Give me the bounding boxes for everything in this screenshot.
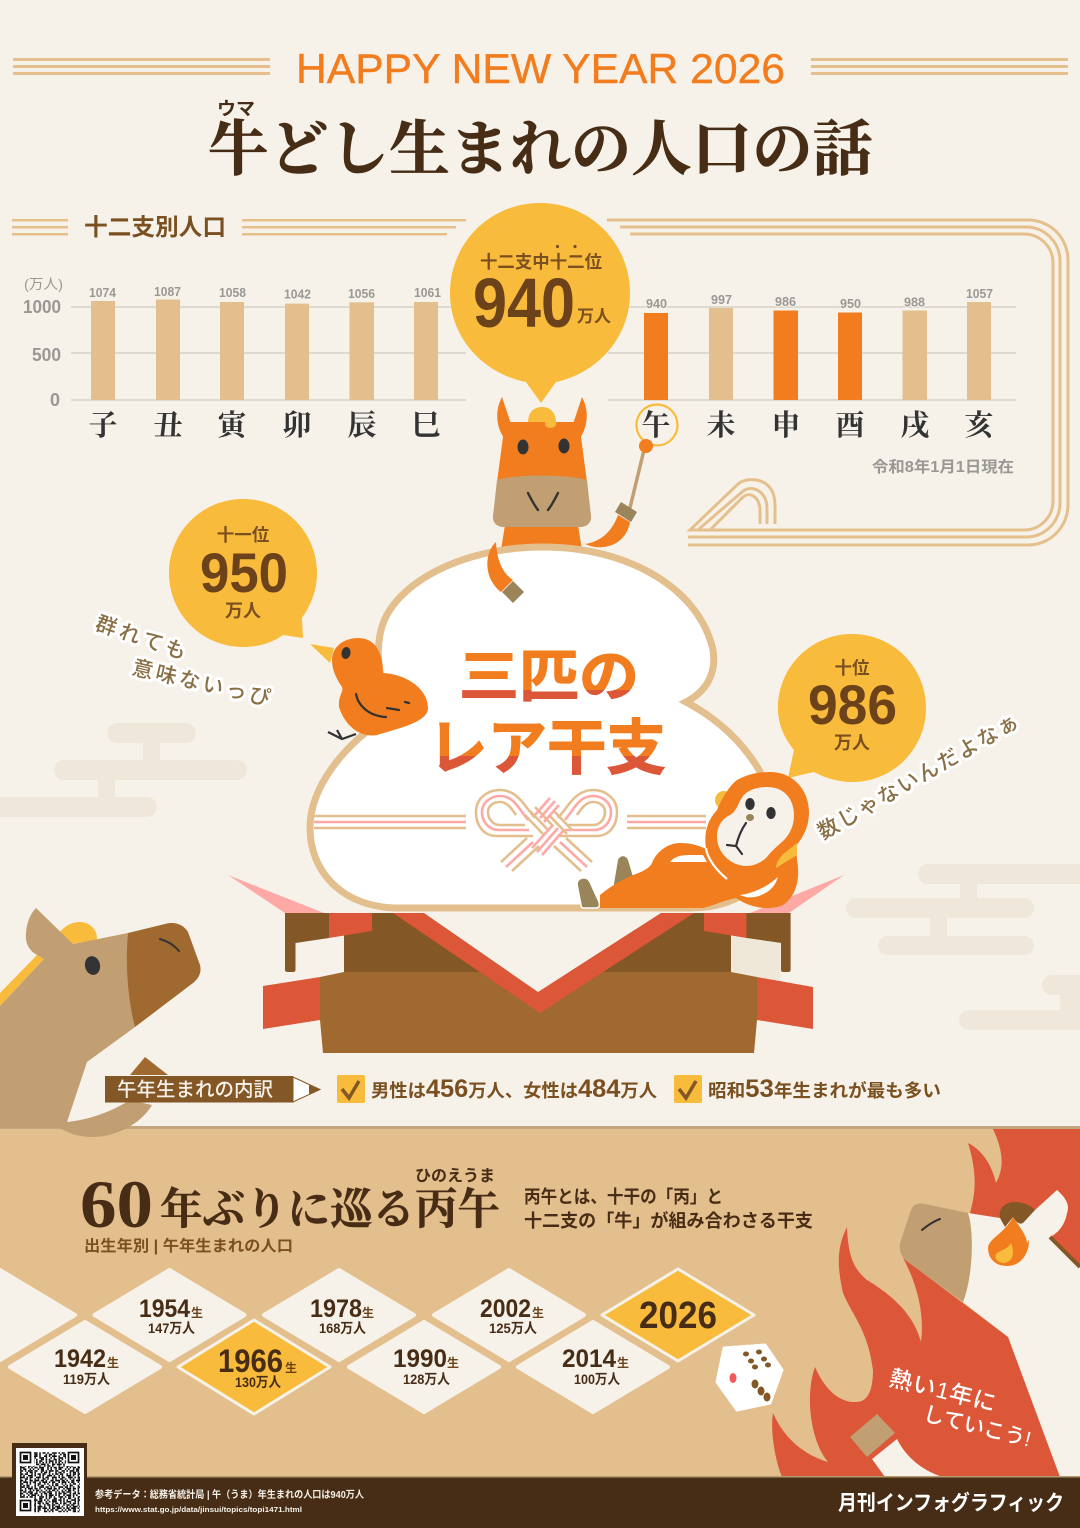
bubble: tenth place 986: 986 (808, 673, 897, 736)
section heading: hinoeuma (80, 1166, 500, 1242)
upper tray (344, 913, 731, 973)
burning horse right (772, 1129, 1080, 1477)
value labels: 997 (711, 293, 732, 307)
eyes (745, 798, 776, 819)
horse on top of mochi holding pointer (493, 397, 653, 550)
feet (577, 878, 599, 908)
headline: three rare zodiac: レア干支 (428, 715, 666, 782)
diamond: 1978: 168万人 (319, 1320, 366, 1336)
diamond: 2002: 125万人 (489, 1320, 537, 1336)
diamond: partial (0, 1270, 75, 1360)
brush band (615, 502, 637, 522)
tail tuft cream (872, 1439, 943, 1477)
eye (83, 955, 102, 976)
muzzle (493, 476, 591, 527)
bubble: eleventh place 950 (169, 499, 317, 647)
kagami mochi (310, 547, 777, 908)
eye (341, 646, 351, 660)
value labels: 988 (904, 296, 925, 310)
diamond: 1990: 1990 (393, 1345, 447, 1373)
flame inner (995, 1243, 1013, 1263)
bubble: eleventh place 950: 950 (200, 541, 288, 604)
value labels: 1042 (284, 288, 311, 302)
nose (746, 814, 754, 821)
tail brush (585, 515, 630, 547)
pink paper corners (228, 875, 844, 913)
bubble: tenth place 986: 十位 (834, 658, 870, 678)
diamond: 1954: 1954 (139, 1295, 190, 1323)
diamond: 1990: 生 (447, 1355, 459, 1370)
bow loop right (558, 790, 617, 836)
muzzle (900, 1203, 972, 1302)
zodiac characters: 亥 (964, 409, 994, 442)
header stripes right (811, 58, 1068, 75)
diamond: 2014: 100万人 (574, 1371, 620, 1387)
forelock (528, 407, 556, 428)
timeline diamonds (0, 1269, 754, 1414)
band edge (0, 1126, 1080, 1129)
mane (1050, 1237, 1080, 1267)
diamond: 2014: 2014 (562, 1345, 616, 1373)
face (497, 422, 587, 482)
heading: happy new year: HAPPY NEW YEAR 2026 (296, 45, 785, 92)
diamond: 1954: 147万人 (148, 1320, 195, 1336)
clouds: left (0, 723, 247, 817)
pointer stick (628, 450, 644, 516)
quote: bird: 群れても (92, 612, 193, 666)
diamond: 1966: 生 (285, 1360, 297, 1375)
zodiac characters: 寅 (217, 409, 249, 442)
decorative cord frame (607, 220, 1068, 545)
y axis labels (23, 276, 63, 410)
check item: showa 53: 昭和53年生まれが最も多い (708, 1075, 941, 1103)
diamond: 2014: 生 (617, 1355, 629, 1370)
cream paper (424, 913, 661, 992)
y axis labels: 1000 (23, 297, 61, 317)
zodiac characters: 未 (706, 409, 736, 442)
diamond: 1990 (349, 1322, 499, 1412)
diamond: 1966 (178, 1320, 330, 1414)
bubble: twelfth place 940 (450, 203, 630, 403)
footer top edge (0, 1476, 1080, 1478)
description: 十二支の「牛」が組み合わさる干支 (524, 1210, 813, 1231)
diamond: 1942: 生 (107, 1355, 119, 1370)
lower flame with text area (772, 1227, 1060, 1477)
diamond: 2002 (434, 1270, 584, 1360)
muzzle (127, 923, 201, 1027)
horse body (963, 1190, 1080, 1477)
bubble: tenth place 986: 万人 (834, 733, 870, 753)
lower band (0, 1128, 1080, 1478)
check item: male female: 男性は456万人、女性は484万人 (371, 1075, 657, 1103)
breakdown pencil banner: 午年生まれの内訳 (117, 1079, 273, 1101)
diamond: 1966: 1966 (218, 1343, 283, 1379)
mane (0, 955, 44, 1006)
ear left (715, 791, 733, 809)
mizuhiki cord bow (314, 790, 706, 871)
value labels: 1061 (414, 286, 441, 300)
zodiac characters (88, 409, 994, 442)
body (0, 908, 152, 1137)
quote: bird (92, 612, 275, 711)
bubble: eleventh place 950: 万人 (225, 601, 261, 621)
diamond: 1990: 128万人 (403, 1371, 450, 1387)
dice (717, 1345, 782, 1410)
ears (497, 397, 587, 438)
red V ribbon (393, 913, 694, 1013)
description: 丙午とは、十干の「丙」と (524, 1187, 723, 1207)
diamond: 1978 (264, 1270, 414, 1360)
bow loop left (476, 790, 535, 836)
horse tail over mochi (487, 542, 524, 603)
sanbo offering stand (228, 875, 844, 1053)
value labels: 1057 (966, 287, 993, 301)
bubble: eleventh place 950: 十一位 (217, 525, 270, 545)
pointer ball (639, 439, 653, 453)
cream side panel (731, 936, 780, 981)
flame icon (988, 1217, 1029, 1266)
source url: https://www.stat.go.jp/data/jinsui/topics/topi1471.html (95, 1505, 302, 1514)
value labels (89, 285, 993, 311)
section heading: hinoeuma: 60 (80, 1166, 153, 1242)
diamond: 2026 (602, 1269, 754, 1361)
legs (328, 730, 356, 739)
tail wrap tan (850, 1414, 895, 1457)
tail gap (740, 877, 778, 897)
zodiac characters: 戌 (900, 409, 930, 442)
diamond: 2002: 2002 (480, 1295, 531, 1323)
value labels: 1056 (348, 287, 375, 301)
small brown ear (130, 1057, 168, 1075)
zodiac characters: 巳 (411, 410, 441, 442)
lower tray (320, 972, 757, 1053)
bird (310, 638, 428, 739)
value labels: 1058 (219, 286, 246, 300)
bubble: twelfth place 940: 十二支中十二位 (480, 252, 602, 272)
diamond: 1954 (94, 1270, 244, 1360)
quote: bird: 意味ないっぴ (130, 656, 275, 711)
bow knot and tails (501, 798, 592, 871)
zodiac characters: 卯 (282, 409, 312, 442)
zodiac characters: 子 (88, 410, 118, 442)
breakdown pencil banner (105, 1076, 320, 1102)
red ribbons lower (263, 977, 813, 1029)
footer bar (0, 1477, 1080, 1528)
clouds: right (846, 864, 1080, 1030)
zodiac characters: 辰 (347, 409, 377, 442)
forelock (60, 922, 97, 947)
value labels: 986 (775, 295, 796, 309)
bubble: twelfth place 940: 万人 (577, 307, 611, 326)
ear right (776, 843, 797, 868)
value labels: 940 (646, 297, 667, 311)
diamond: 1978: 1978 (310, 1295, 362, 1323)
red ribbons upper (329, 913, 746, 938)
headline: three rare zodiac: 三匹の (459, 645, 639, 708)
zodiac characters: 酉 (835, 409, 865, 442)
diamond: 1942 (10, 1322, 160, 1412)
bars (91, 300, 991, 400)
neck (501, 525, 582, 550)
quote: monkey: 数じゃないんだよなぁ (814, 709, 1025, 844)
bubble: twelfth place 940: 940 (473, 264, 575, 342)
diamond: 1942: 119万人 (63, 1371, 110, 1387)
callout: hot year: 熱い1年に (887, 1365, 1000, 1416)
zodiac characters: 申 (771, 409, 801, 442)
qr code (12, 1443, 87, 1521)
diamond: 1954: 生 (191, 1305, 203, 1320)
body and hood (600, 772, 809, 908)
forelock (1000, 1202, 1035, 1227)
heading ruby: ウマ (217, 99, 255, 119)
white highlights (706, 848, 727, 879)
monkey (577, 772, 809, 908)
beak (310, 644, 334, 663)
value labels: 1074 (89, 286, 116, 300)
y axis labels: 500 (32, 345, 61, 365)
value labels: 950 (840, 297, 861, 311)
callout: hot year: していこう! (921, 1403, 1033, 1452)
circle around horse character (636, 404, 678, 446)
bubble: tenth place 986 (778, 634, 926, 782)
wing (356, 694, 409, 717)
eye line (160, 939, 179, 951)
diamond: 1978: 生 (362, 1305, 374, 1320)
value labels: 1087 (154, 285, 181, 299)
section heading: hinoeuma: 年ぶりに巡る丙午 (160, 1186, 500, 1234)
section heading: population by zodiac: 十二支別人口 (84, 214, 226, 240)
section sub heading: 出生年別 | 午年生まれの人口 (84, 1236, 293, 1255)
eye line (922, 1219, 940, 1230)
diamond: 2014 (518, 1322, 668, 1412)
diamond: 1942: 1942 (54, 1345, 106, 1373)
mouth (727, 823, 746, 854)
diamond: 1966: 130万人 (235, 1374, 281, 1390)
eyes and nostrils (518, 438, 570, 510)
face (717, 787, 794, 866)
y axis labels: 0 (50, 390, 60, 410)
callout: hot year (887, 1365, 1033, 1452)
headline: three rare zodiac (428, 645, 666, 782)
main title: 牛どし生まれの人口の話 (208, 117, 873, 183)
bar chart: population by zodiac (23, 276, 1016, 476)
diamond: 2026: 2026 (639, 1295, 717, 1337)
body (332, 638, 428, 735)
section heading: hinoeuma: ひのえうま (415, 1167, 495, 1185)
source text: 参考データ：総務省統計局 | 午（うま）年生まれの人口は940万人 (95, 1488, 364, 1501)
diamond: 2002: 生 (532, 1305, 544, 1320)
highlighted bars (644, 310, 862, 400)
upper flame (960, 1129, 1080, 1290)
zodiac characters: 午 (641, 409, 671, 442)
y axis labels: (万人) (24, 276, 63, 292)
large horse left (0, 908, 201, 1137)
description (524, 1187, 813, 1231)
zodiac characters: 丑 (153, 410, 183, 442)
date note: 令和8年1月1日現在 (872, 457, 1014, 476)
header stripes left (13, 58, 270, 75)
